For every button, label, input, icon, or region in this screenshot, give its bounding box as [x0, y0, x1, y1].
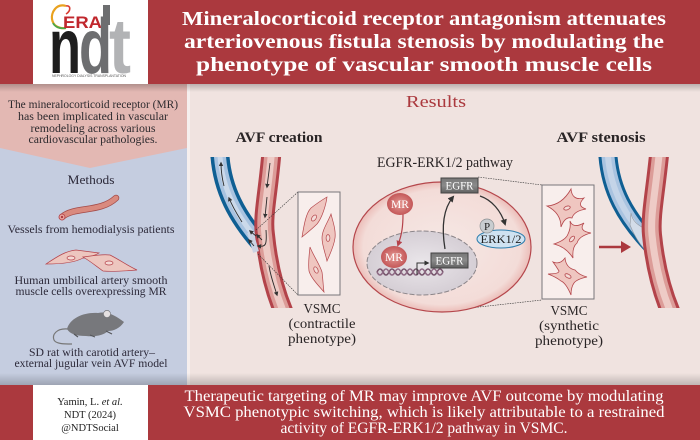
ERK1/2: ERK1/2	[480, 232, 522, 246]
heading: AVF stenosis: AVF stenosis	[556, 130, 646, 146]
MR cytoplasm	[387, 193, 413, 215]
heading: pathway: EGFR-ERK1/2 pathway	[377, 155, 514, 171]
background text: The mineralocorticoid receptor (MR)	[8, 99, 178, 111]
methods heading: Methods	[68, 172, 114, 187]
EGFR membrane: EGFR	[446, 178, 474, 192]
label: cells: muscle cells overexpressing MR	[16, 286, 167, 298]
logo: d	[79, 2, 112, 90]
label: cells: Human umbilical artery smooth	[14, 275, 168, 287]
arrow: EGFR to ERK	[480, 196, 505, 224]
MR cytoplasm: MR	[391, 199, 409, 211]
background text: cardiovascular pathologies.	[28, 134, 158, 146]
logo	[33, 0, 148, 90]
label: rat: SD rat with carotid artery–	[29, 347, 155, 359]
label: rat: external jugular vein AVF model	[14, 358, 168, 370]
arrow: transcription	[417, 263, 428, 275]
panel: contractile VSMC	[298, 192, 340, 295]
label: cells	[14, 275, 168, 298]
logo: NEPHROLOGY DIALYSIS TRANSPLANTATION	[52, 74, 126, 78]
logo: ERA	[63, 13, 102, 32]
conclusion text	[184, 388, 664, 437]
phospho P: P	[484, 221, 490, 233]
title: Mineralocorticoid receptor antagonism attenuates	[182, 8, 666, 30]
label: VSMC contractile: phenotype)	[288, 331, 356, 346]
diagram: cell with pathway	[353, 178, 531, 312]
background text: has been implicated in vascular	[18, 111, 168, 123]
footer band	[0, 385, 700, 440]
panel: synthetic VSMC	[542, 185, 594, 299]
conclusion text: VSMC phenotypic switching, which is likely attributable to a restrained	[184, 404, 664, 421]
background text: remodeling across various	[30, 123, 156, 135]
label: VSMC contractile: (contractile	[288, 316, 356, 331]
label: VSMC synthetic: (synthetic	[539, 318, 599, 333]
header band	[0, 0, 700, 84]
label: VSMC contractile	[288, 301, 356, 346]
diagram: AVF stenosis vessels	[608, 145, 675, 322]
citation box: @NDTSocial	[61, 423, 119, 434]
arrow: EGFR to membrane	[443, 197, 453, 249]
icon: rat	[54, 310, 124, 344]
zoom lines: synthetic	[470, 177, 542, 308]
logo: t	[109, 2, 131, 90]
label: rat	[14, 347, 168, 370]
title: phenotype of vascular smooth muscle cells	[196, 54, 652, 76]
zoom lines: contractile	[256, 192, 298, 295]
arrow: MR to nucleus	[398, 214, 403, 245]
label: VSMC synthetic: phenotype)	[535, 333, 603, 348]
label: vessels: Vessels from hemodialysis patients	[8, 224, 175, 236]
label: VSMC synthetic	[535, 303, 603, 348]
title	[182, 8, 666, 76]
conclusion text: activity of EGFR-ERK1/2 pathway in VSMC.	[280, 420, 568, 437]
citation box: NDT (2024)	[64, 410, 117, 421]
heading: AVF creation: AVF creation	[236, 130, 323, 146]
background text	[8, 99, 178, 146]
nucleus	[367, 231, 477, 295]
icon: smooth muscle cells	[46, 250, 137, 271]
results heading: Results	[406, 92, 466, 111]
phospho P	[480, 219, 494, 233]
MR nucleus	[381, 246, 407, 268]
icon: vessel	[59, 198, 116, 220]
EGFR nuclear: EGFR	[436, 254, 464, 268]
label: VSMC synthetic: VSMC	[550, 303, 588, 318]
MR nucleus: MR	[385, 252, 403, 264]
conclusion text: Therapeutic targeting of MR may improve AVF outcome by modulating	[184, 388, 664, 405]
title: arteriovenous fistula stenosis by modulating the	[184, 31, 664, 53]
diagram: AVF creation vessels	[220, 145, 288, 322]
DNA	[377, 269, 443, 275]
arrow: to stenosis	[599, 241, 631, 253]
label: VSMC contractile: VSMC	[304, 301, 340, 316]
panel: left background and methods	[0, 84, 700, 385]
citation box: Yamin, L. et al.	[57, 397, 123, 408]
logo: n	[49, 2, 81, 90]
citation box	[33, 385, 148, 440]
ERK1/2	[477, 230, 525, 248]
